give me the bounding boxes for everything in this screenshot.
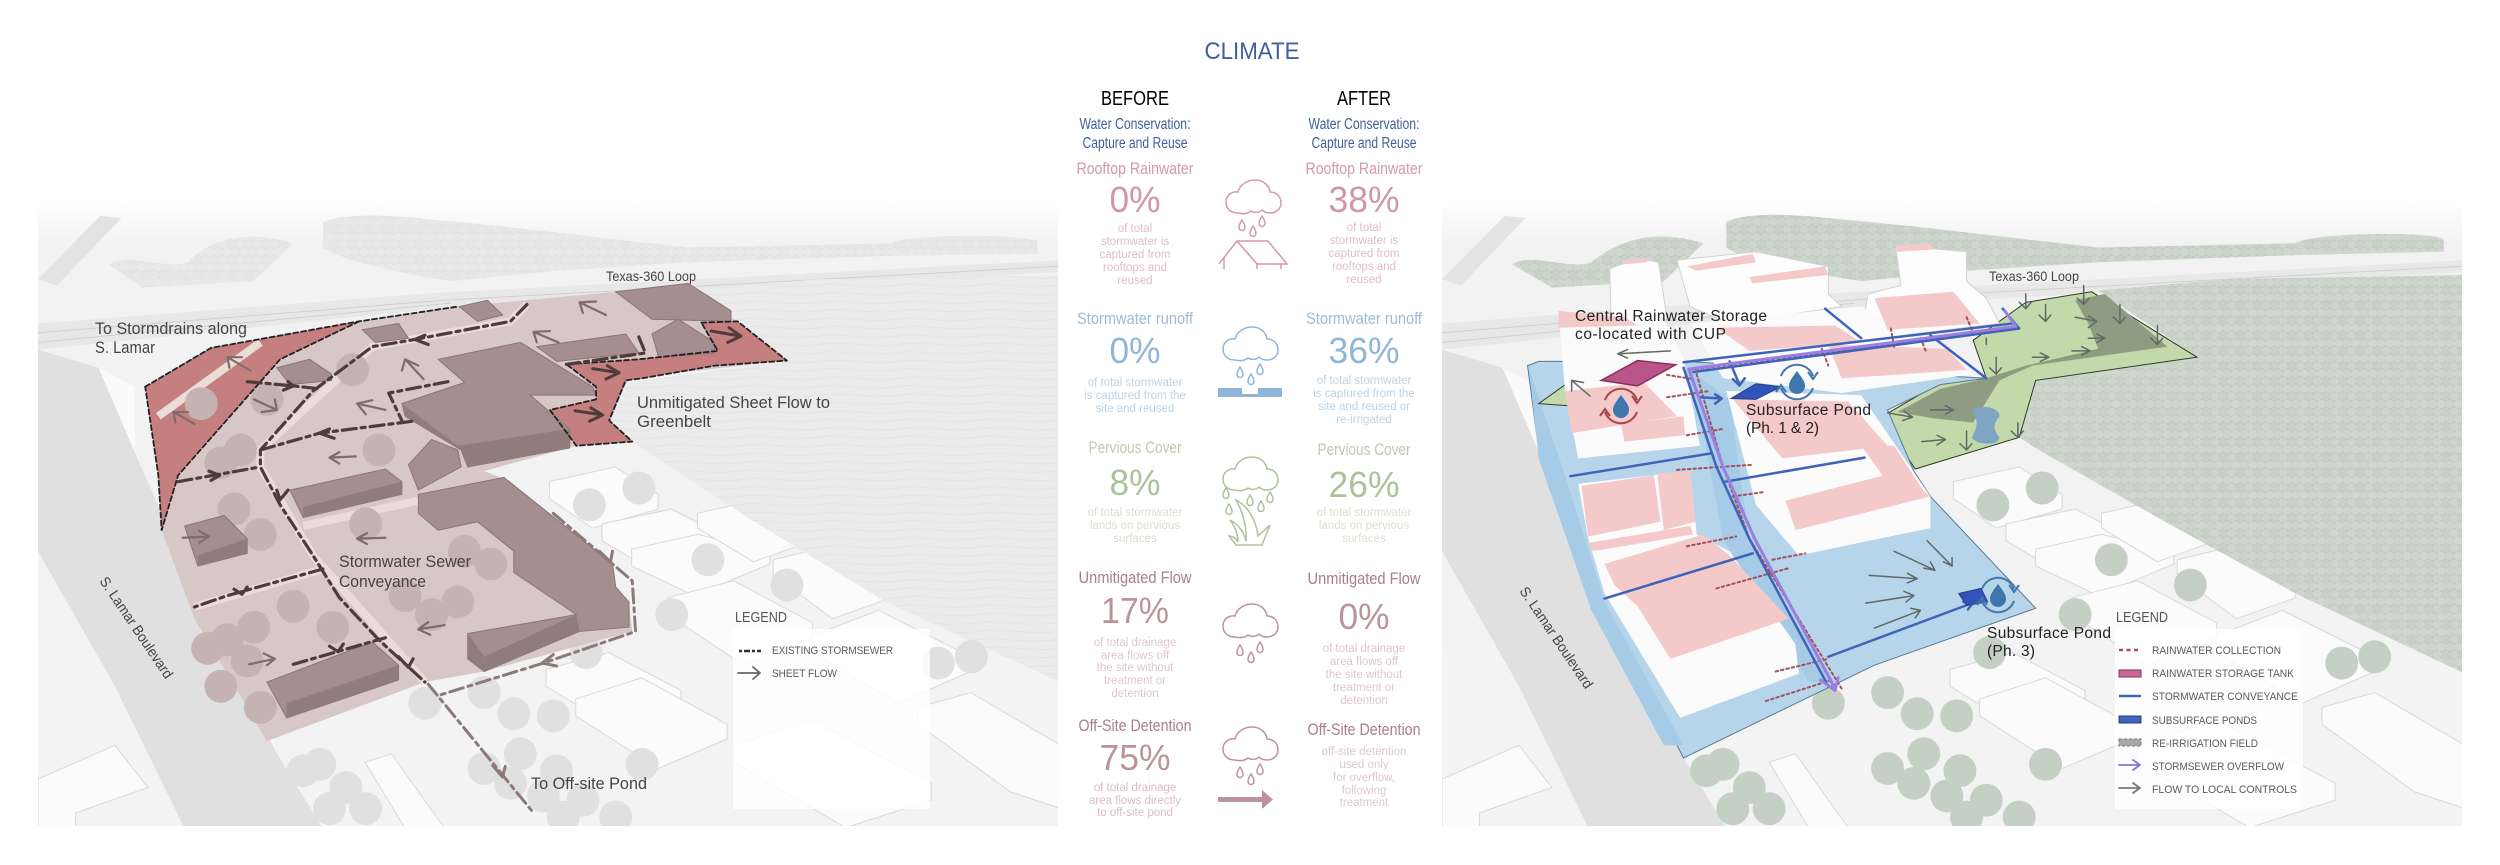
panel: before site map <box>36 180 1066 834</box>
site plan after <box>1512 215 2465 834</box>
greenbelt contour forest <box>609 275 1060 682</box>
label: Stormwater Sewer Conveyance: Conveyance <box>339 572 426 591</box>
metric: stormwater runoff before: of total stormwater <box>1088 377 1182 389</box>
legend title: LEGEND <box>735 610 787 626</box>
metric: pervious cover after: lands on pervious <box>1319 520 1409 532</box>
metric: rooftop rainwater after <box>1306 159 1423 286</box>
pale road strips <box>158 304 527 682</box>
hill with tree band <box>109 216 1037 288</box>
blue stormwater area <box>1528 361 2036 758</box>
label: S. Lamar Boulevard (after): S. Lamar Boulevard <box>1516 584 1595 692</box>
metric: unmitigated flow before: Unmitigated Flow <box>1078 568 1192 587</box>
label: Stormwater Sewer Conveyance: Stormwater Sewer <box>339 552 471 571</box>
base map: surrounding neighbourhood <box>36 180 1066 828</box>
metric: stormwater runoff after: of total stormwater <box>1317 375 1411 387</box>
panel: after site map <box>1440 180 2470 834</box>
metric: off-site detention after <box>1308 720 1420 809</box>
metric: unmitigated flow before: 17% <box>1101 590 1169 631</box>
metric: off-site detention after: Off-Site Detention <box>1308 720 1420 739</box>
metric: stormwater runoff after: 36% <box>1328 330 1400 371</box>
stormwater conveyance lines <box>1570 309 2019 686</box>
subheading: before water conservation: Capture and Reuse <box>1082 135 1188 152</box>
metric: pervious cover before: lands on pervious <box>1090 520 1180 532</box>
metric: rooftop rainwater before: reused <box>1117 275 1153 287</box>
metric: pervious cover before: of total stormwater <box>1088 507 1182 519</box>
sheet flow arrows <box>173 302 606 665</box>
legend: before <box>733 610 930 809</box>
metric: rooftop rainwater after: 38% <box>1328 179 1400 220</box>
icon: cloud with rain and arrow <box>1218 727 1278 809</box>
metric: unmitigated flow before: area flows off <box>1101 650 1170 662</box>
metric: pervious cover after: of total stormwater <box>1317 507 1411 519</box>
metric: rooftop rainwater after: stormwater is <box>1330 235 1398 247</box>
legend item: rainwater storage tank: RAINWATER STORAGE TANK <box>2152 668 2295 680</box>
heading: AFTER: AFTER <box>1337 88 1391 110</box>
unmitigated red zones <box>145 321 787 530</box>
legend: after <box>2115 610 2303 809</box>
existing stormsewer lines <box>178 304 645 682</box>
icon: cloud rain over inlet <box>1218 327 1282 397</box>
rainwater collection dotted lines <box>1667 317 2019 701</box>
label: To Stormdrains along S. Lamar: S. Lamar <box>95 338 155 357</box>
stormsewer overflow line <box>1689 311 2016 690</box>
metric: stormwater runoff after: re-irrigated <box>1336 414 1392 426</box>
pink roofs <box>1558 243 1980 659</box>
subheading: after water conservation: Capture and Reuse <box>1312 135 1416 152</box>
metric: unmitigated flow after: detention <box>1340 695 1388 707</box>
metric: unmitigated flow after <box>1308 569 1421 707</box>
legend item: existing stormsewer: EXISTING STORMSEWER <box>772 645 893 657</box>
metric: off-site detention before: area flows directly <box>1089 795 1181 807</box>
metric: rooftop rainwater before: rooftops and <box>1103 262 1167 274</box>
off-site stormsewer lines <box>428 513 636 813</box>
metric: pervious cover after: surfaces <box>1342 533 1386 545</box>
upper forest band <box>1726 215 2444 281</box>
metric: unmitigated flow after: area flows off <box>1330 656 1399 668</box>
subsurface pond phase 1 and 2 <box>1731 384 1781 399</box>
metric: unmitigated flow after: of total drainage <box>1323 643 1405 655</box>
icon: rain reuse cycle <box>1600 389 1642 423</box>
metric: unmitigated flow after: treatment or <box>1333 682 1395 694</box>
metric: pervious cover after: 26% <box>1328 464 1400 505</box>
metric: unmitigated flow after: 0% <box>1338 596 1390 637</box>
label: Texas-360 Loop (after): Texas-360 Loop <box>1989 268 2079 284</box>
label: To Stormdrains along S. Lamar: To Stormdrains along <box>95 319 247 338</box>
site trees <box>185 353 507 724</box>
metric: unmitigated flow before: treatment or <box>1104 675 1166 687</box>
metric: stormwater runoff after <box>1306 309 1422 426</box>
site buildings <box>1558 307 1973 718</box>
metric: stormwater runoff before: 0% <box>1110 330 1160 371</box>
metric: stormwater runoff after: site and reused or <box>1318 401 1410 413</box>
metric: off-site detention before <box>1078 716 1192 819</box>
metric: rooftop rainwater before: captured from <box>1100 249 1170 261</box>
metric: unmitigated flow after: Unmitigated Flow <box>1308 569 1421 588</box>
metric: rooftop rainwater after: rooftops and <box>1332 261 1396 273</box>
flow arrows in red zones <box>575 328 741 421</box>
metric: rooftop rainwater before <box>1076 159 1194 287</box>
metric: off-site detention before: of total drainage <box>1094 782 1176 794</box>
metric: off-site detention after: for overflow, <box>1333 772 1395 784</box>
metric: rooftop rainwater after: of total <box>1347 222 1381 234</box>
legend item: stormwater conveyance: STORMWATER CONVEYANCE <box>2152 691 2298 703</box>
metric: off-site detention before: 75% <box>1100 737 1170 778</box>
base map: surrounding neighbourhood <box>1440 180 2470 828</box>
metric: pervious cover after <box>1317 440 1411 545</box>
forest <box>2019 275 2465 674</box>
green landscape area <box>1886 292 2197 469</box>
metric: unmitigated flow before: of total drainage <box>1094 637 1176 649</box>
metric: off-site detention after: treatment <box>1340 797 1389 809</box>
re-irrigation field <box>1897 294 2167 423</box>
metric: pervious cover after: Pervious Cover <box>1318 440 1411 459</box>
subheading: before water conservation: Water Conservation: <box>1080 116 1190 133</box>
heading: CLIMATE: CLIMATE <box>1204 38 1300 65</box>
existing buildings <box>185 283 731 718</box>
metric: unmitigated flow before <box>1078 568 1192 700</box>
label: Subsurface Pond Ph 3: (Ph. 3) <box>1987 643 2035 660</box>
rainwater storage tank <box>1601 361 1676 386</box>
towers <box>1610 245 1999 340</box>
off-site chevrons <box>493 551 613 777</box>
central panel: climate comparison <box>1076 38 1423 819</box>
metric: stormwater runoff before: site and reused <box>1096 403 1174 415</box>
icon: cloud with rain <box>1223 604 1278 662</box>
subheading: after water conservation: Water Conservation: <box>1308 116 1420 133</box>
subsurface pond phase 3 <box>1959 588 1988 605</box>
metric: off-site detention after: used only <box>1339 759 1389 771</box>
legend backing panel <box>2115 629 2303 809</box>
label: Central Rainwater Storage: Central Rainwater Storage <box>1575 308 1767 325</box>
metric: stormwater runoff after: is captured from the <box>1313 388 1415 400</box>
legend item: sheet flow <box>738 667 838 680</box>
icon: pond cycle phase 3 <box>1977 578 2019 612</box>
metric: rooftop rainwater before: of total <box>1118 223 1152 235</box>
label: Texas-360 Loop (before): Texas-360 Loop <box>606 268 696 284</box>
legend title: LEGEND <box>2116 610 2168 626</box>
legend item: subsurface ponds: SUBSURFACE PONDS <box>2152 715 2257 727</box>
metric: off-site detention after: off-site detention <box>1322 746 1406 758</box>
label: Subsurface Pond Ph 3: Subsurface Pond <box>1987 625 2111 642</box>
metric: pervious cover before: surfaces <box>1113 533 1157 545</box>
label: Subsurface Pond Ph 1 and 2: (Ph. 1 & 2) <box>1746 420 1819 437</box>
legend item: stormsewer overflow: STORMSEWER OVERFLOW <box>2152 761 2285 773</box>
legend backing panel <box>733 629 930 809</box>
site area <box>145 292 787 741</box>
site boundary dashes <box>145 307 787 530</box>
upper-left trees <box>1512 236 1703 288</box>
metric: stormwater runoff before <box>1077 309 1193 415</box>
metric: unmitigated flow before: detention <box>1111 688 1159 700</box>
building side shading <box>198 404 580 718</box>
label: Central Rainwater Storage: co-located with CUP <box>1575 326 1726 343</box>
label: Unmitigated Sheet Flow to Greenbelt: Greenbelt <box>637 412 711 431</box>
flow to local control arrows <box>1572 285 2163 628</box>
metric: unmitigated flow before: the site without <box>1097 662 1174 674</box>
metric: rooftop rainwater before: Rooftop Rainwater <box>1076 159 1194 178</box>
metric: pervious cover before <box>1088 438 1182 545</box>
metric: unmitigated flow after: the site without <box>1326 669 1403 681</box>
metric: rooftop rainwater after: reused <box>1346 274 1382 286</box>
metric: pervious cover before: 8% <box>1110 462 1160 503</box>
chevrons on sewer lines <box>209 335 428 667</box>
darker water channels <box>1529 366 1835 745</box>
legend item: rainwater collection: RAINWATER COLLECTION <box>2152 645 2281 657</box>
legend item: stormsewer overflow <box>2119 760 2285 773</box>
metric: stormwater runoff before: Stormwater runoff <box>1077 309 1193 328</box>
heading: BEFORE: BEFORE <box>1101 88 1169 110</box>
metric: pervious cover before: Pervious Cover <box>1088 438 1182 457</box>
neighbouring trees <box>287 472 988 834</box>
neighbouring-site green corner <box>1539 383 1568 406</box>
legend item: flow to local controls: FLOW TO LOCAL CONTROLS <box>2152 784 2297 796</box>
label: Subsurface Pond Ph 1 and 2: Subsurface Pond <box>1746 402 1871 419</box>
icon: cloud rain over grass <box>1223 457 1278 545</box>
metric: stormwater runoff after: Stormwater runoff <box>1306 309 1422 328</box>
label: S. Lamar Boulevard (before): S. Lamar Boulevard <box>96 574 175 682</box>
legend item: re-irrigation field: RE-IRRIGATION FIELD <box>2152 738 2258 750</box>
label: To Off-site Pond: To Off-site Pond <box>531 774 647 793</box>
metric: off-site detention before: Off-Site Detention <box>1078 716 1192 735</box>
icon: pond cycle phase 1 and 2 <box>1776 365 1818 399</box>
detention pond <box>1972 407 1999 444</box>
metric: rooftop rainwater after: Rooftop Rainwater <box>1306 159 1423 178</box>
metric: off-site detention after: following <box>1342 785 1386 797</box>
metric: rooftop rainwater before: 0% <box>1110 179 1160 220</box>
neighbouring trees <box>1690 472 2391 834</box>
icon: cloud rain over roof <box>1219 180 1287 269</box>
metric: rooftop rainwater after: captured from <box>1329 248 1399 260</box>
metric: off-site detention before: to off-site pond <box>1097 807 1173 819</box>
site plan before <box>109 216 1060 834</box>
legend item: sheet flow: SHEET FLOW <box>772 668 838 680</box>
label: Unmitigated Sheet Flow to Greenbelt: Unmitigated Sheet Flow to <box>637 393 830 412</box>
metric: stormwater runoff before: is captured from the <box>1084 390 1186 402</box>
metric: rooftop rainwater before: stormwater is <box>1101 236 1169 248</box>
